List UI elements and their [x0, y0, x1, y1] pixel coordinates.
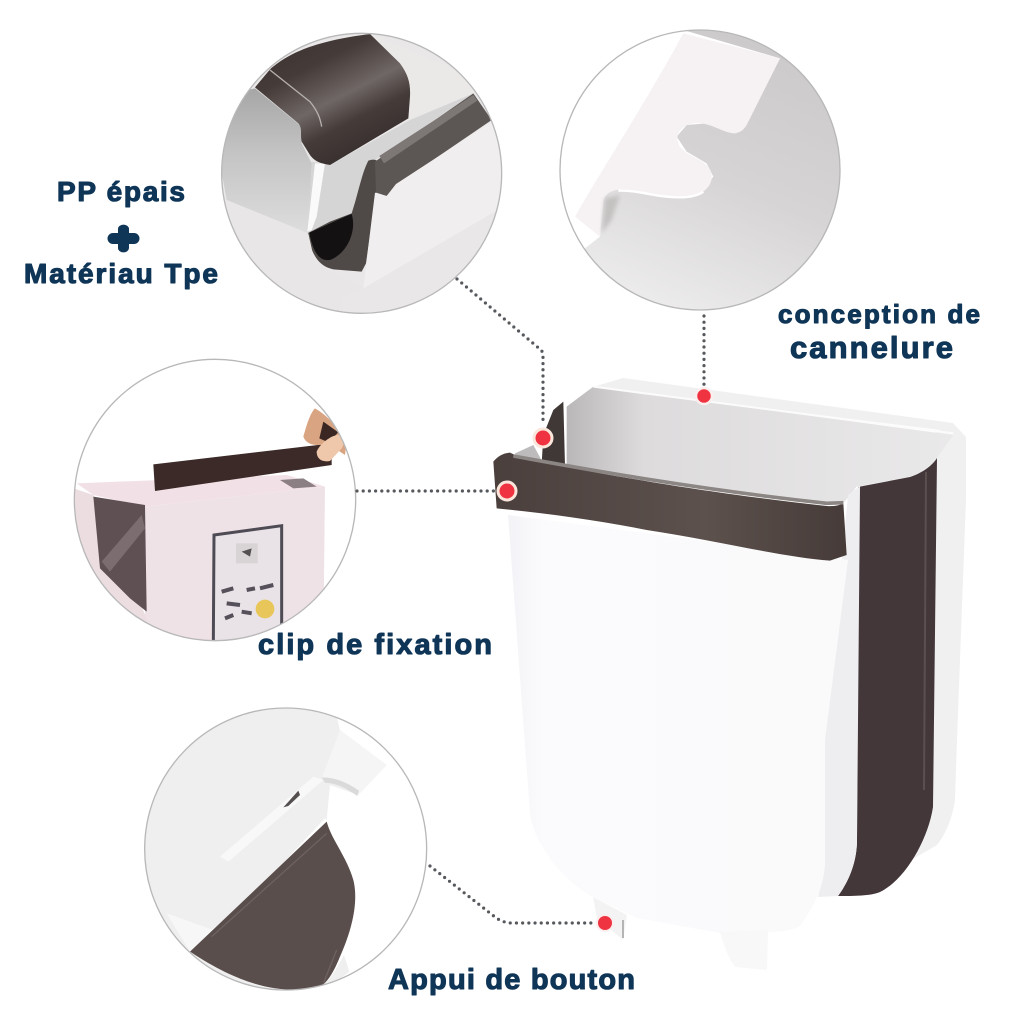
panel: circle detail of push button — [144, 707, 428, 991]
connector: dotted line to button — [430, 866, 596, 923]
front brown rim — [493, 453, 847, 561]
label: conception de: conception de — [778, 299, 980, 329]
label: PP épais: PP épais — [57, 176, 185, 207]
front body — [508, 515, 848, 933]
panel: circle detail of thick PP and TPE edge — [220, 30, 503, 313]
marker: PP corner — [534, 429, 552, 447]
label: cannelure: cannelure — [790, 330, 953, 365]
connector: dotted line to groove — [702, 316, 706, 388]
side strip of the front body — [818, 486, 860, 897]
label: Appui de bouton: Appui de bouton — [388, 964, 635, 996]
folding wall-mounted bin — [493, 378, 966, 970]
bin interior — [515, 387, 953, 505]
bin back rim and right side panel — [593, 378, 966, 890]
panel: circle detail of fixing clip on a bag — [70, 355, 360, 645]
marker: groove — [696, 388, 712, 404]
connector: dotted line to PP corner — [457, 279, 543, 425]
label: Matériau Tpe: Matériau Tpe — [24, 258, 218, 289]
marker: button — [597, 915, 613, 931]
label: clip de fixation: clip de fixation — [258, 629, 492, 661]
connector: dotted line to clip — [357, 489, 497, 493]
icon: plus — [108, 225, 140, 252]
dark rear strap on the side — [838, 458, 937, 896]
bag label sticker — [213, 526, 282, 642]
button tab — [593, 897, 627, 940]
marker: clip — [498, 482, 516, 500]
bin foot — [720, 930, 768, 970]
panel: circle detail of flat groove notch — [559, 29, 841, 311]
